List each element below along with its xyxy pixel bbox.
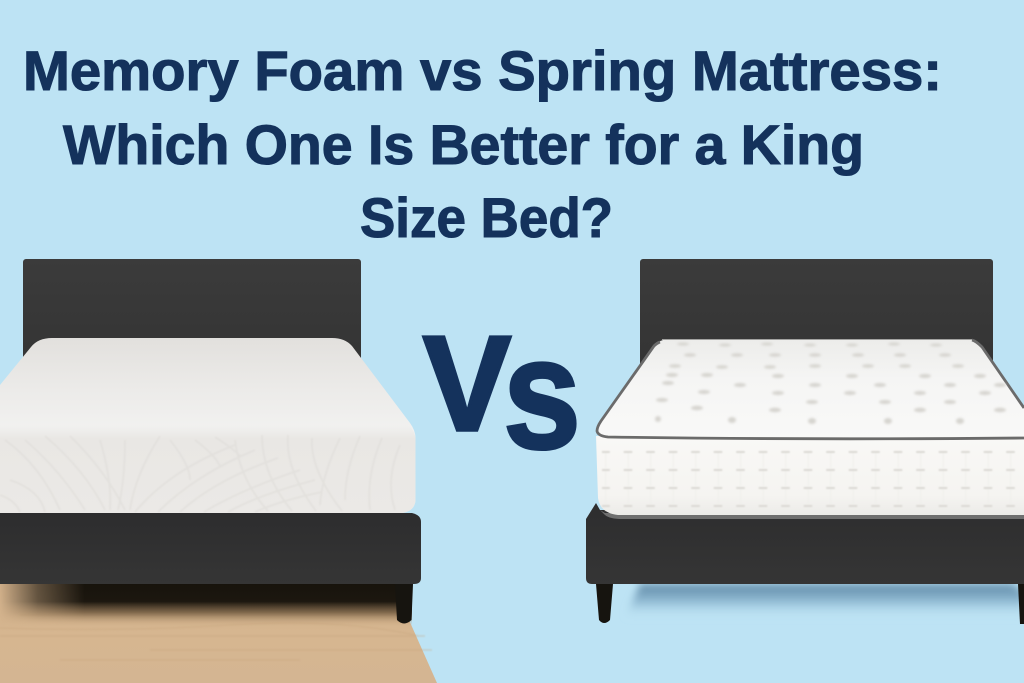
mattress top <box>0 338 416 513</box>
tufting marks <box>655 342 1006 424</box>
mattress side <box>596 436 1024 515</box>
shadow under spring bed <box>625 584 1024 618</box>
title <box>23 39 942 249</box>
floor under memory foam bed <box>0 584 437 683</box>
front leg <box>596 584 613 623</box>
bed frame <box>0 513 421 584</box>
headboard <box>640 259 993 379</box>
Vs label: V <box>423 308 511 459</box>
memory foam bed <box>0 259 421 624</box>
Vs label <box>423 306 581 482</box>
bed frame <box>586 503 1024 584</box>
lower piping <box>600 510 1024 519</box>
title: Which One Is Better for a King <box>63 113 864 176</box>
leg <box>395 584 413 624</box>
mattress top <box>597 339 1024 439</box>
title: Memory Foam vs Spring Mattress: <box>23 39 942 102</box>
right leg <box>1018 584 1024 624</box>
mattress piping <box>597 340 1024 439</box>
headboard <box>23 259 361 379</box>
Vs label: s <box>503 306 581 482</box>
title: Size Bed? <box>360 186 613 249</box>
mattress side with wave pattern <box>0 425 416 513</box>
spring mattress bed <box>586 259 1024 624</box>
side stitching <box>602 451 1024 511</box>
